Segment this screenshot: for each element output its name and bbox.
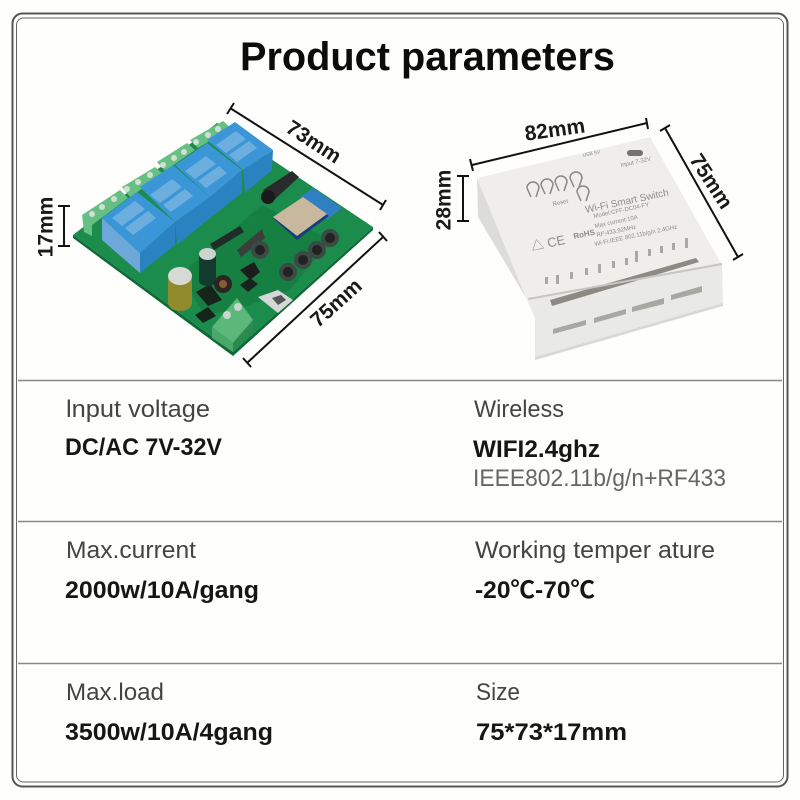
enclosure printed labels: Wi-Fi:IEEE 802.11b/g/n 2.4GHz	[594, 225, 678, 248]
relay 4	[207, 122, 273, 193]
spec: size: 75*73*17mm	[476, 719, 627, 746]
spec: max load: Max.load	[66, 679, 164, 706]
status led	[627, 150, 643, 156]
dimension: 73mm: 73mm	[282, 116, 345, 168]
enclosure printed labels: RoHS	[573, 227, 596, 241]
dimension: 17mm: 17mm	[35, 197, 58, 257]
spec: max load	[65, 679, 273, 746]
spec: wireless: WIFI2.4ghz	[473, 436, 600, 463]
dimension: 75mm board	[243, 232, 387, 367]
enclosure front face	[527, 265, 723, 357]
enclosure top face	[477, 137, 722, 300]
enclosure printed labels: △ CE	[530, 232, 567, 254]
spec: max current	[65, 537, 259, 604]
dimension: 28mm	[433, 170, 469, 230]
antenna coil	[261, 171, 299, 204]
spec: working temperature	[475, 537, 715, 604]
dimension: 75mm board: 75mm	[306, 274, 367, 332]
spec: input voltage: lnput voltage	[66, 396, 210, 423]
enclosure printed labels: Reset	[552, 199, 569, 208]
PCB darker component zone	[180, 205, 330, 315]
terminal markings	[545, 238, 688, 284]
dimension: 73mm	[227, 103, 386, 210]
enclosure printed labels: Input 7-32V	[620, 157, 652, 169]
spec: wireless: Wireless	[474, 396, 564, 423]
screw terminal blocks	[82, 121, 231, 236]
wire slot	[550, 258, 699, 306]
wifi module	[273, 188, 342, 240]
relay 2	[140, 165, 210, 245]
chips and header pins	[195, 226, 265, 323]
relay 1	[102, 192, 175, 273]
spec: working temperature: -20℃-70℃	[475, 577, 595, 604]
micro usb port	[258, 290, 293, 313]
spec: working temperature: Working temper ature	[475, 537, 715, 564]
enclosure printed labels: Wi-Fi Smart Switch	[584, 188, 670, 216]
spec: input voltage	[65, 396, 222, 461]
dimension: 82mm: 82mm	[523, 114, 587, 146]
relay print marks	[112, 131, 257, 235]
enclosure printed labels: USB 5V	[582, 149, 601, 159]
dimension: 28mm: 28mm	[433, 170, 456, 230]
spec: max current: Max.current	[66, 537, 196, 564]
tactile buttons	[251, 229, 339, 281]
enclosure printed labels: Max current:10A	[594, 215, 638, 230]
spec: size: Size	[476, 679, 520, 706]
spec: wireless: IEEE802.11b/g/n+RF433	[473, 465, 726, 492]
enclosure printed labels	[530, 149, 678, 254]
PCB base	[73, 123, 373, 352]
dimension: 17mm	[35, 197, 70, 257]
enclosure left side	[477, 178, 545, 357]
relay 3	[175, 143, 242, 218]
spec: wireless	[473, 396, 726, 492]
enclosure printed labels: Model:CFF-DC04-FY	[593, 202, 650, 220]
white enclosure product photo	[477, 137, 723, 360]
button icons	[527, 172, 589, 201]
power screw terminal	[212, 298, 253, 352]
dimension: 82mm	[470, 114, 648, 171]
enclosure printed labels: RF:433.92MHz	[596, 225, 637, 239]
dimension: 75mm enclosure	[660, 125, 743, 260]
spec: max load: 3500w/10A/4gang	[65, 719, 273, 746]
title: Product parameters	[240, 35, 615, 79]
spec: size	[476, 679, 627, 746]
spec: input voltage: DC/AC 7V-32V	[65, 434, 222, 461]
capacitors	[168, 248, 232, 311]
dimension: 75mm enclosure: 75mm	[685, 150, 737, 213]
circuit board product photo	[73, 121, 373, 356]
terminal openings	[553, 286, 702, 334]
spec: max current: 2000w/10A/gang	[65, 577, 259, 604]
